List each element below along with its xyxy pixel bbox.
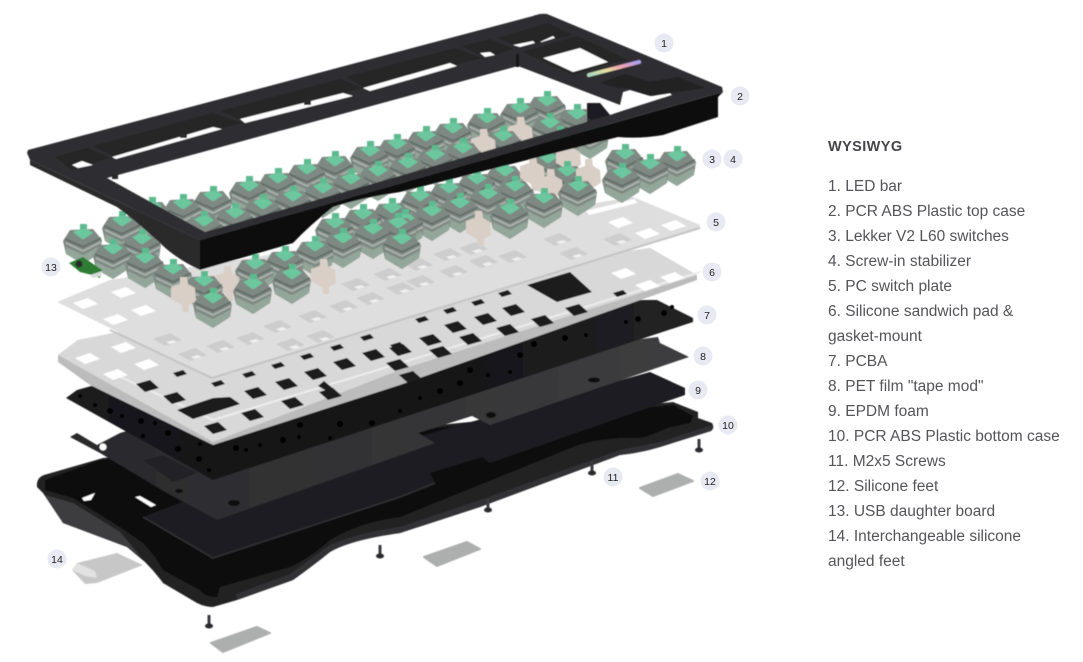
legend list: 1. LED bar (828, 178, 902, 195)
badge 13 (42, 258, 60, 276)
badge 1 (654, 34, 674, 52)
part 8: PET film (70, 337, 689, 520)
badge 11 (604, 468, 622, 486)
legend list: 11. M2x5 Screws (828, 453, 946, 470)
legend list: 3. Lekker V2 L60 switches (828, 228, 1009, 245)
part 12: silicone foot, centre (424, 542, 480, 566)
legend list: 5. PC switch plate (828, 278, 952, 295)
badge 10 (718, 416, 738, 434)
part 12: silicone foot, front (211, 627, 270, 652)
legend list: 13. USB daughter board (828, 503, 995, 520)
legend list: 4. Screw-in stabilizer (828, 253, 971, 270)
legend list: 7. PCBA (828, 353, 887, 370)
badge 12 (700, 472, 720, 490)
badge 4 (724, 150, 742, 168)
legend list: angled feet (828, 553, 905, 570)
badge 2 (730, 86, 750, 106)
badge 9: 9 (695, 385, 701, 397)
part 13: USB daughter board (69, 257, 102, 278)
legend heading: WYSIWYG (828, 139, 902, 155)
part 7: PCBA (66, 300, 693, 480)
part 11: screws (205, 439, 703, 628)
badge 13: 13 (45, 262, 57, 274)
legend list: 8. PET film "tape mod" (828, 378, 983, 395)
badge 8 (694, 346, 712, 366)
badge 5 (706, 212, 726, 232)
badge 12: 12 (704, 476, 716, 488)
badge 2: 2 (737, 91, 743, 103)
badge 10: 10 (722, 420, 734, 432)
badge 6: 6 (709, 267, 715, 279)
part 2: top case (27, 14, 723, 270)
badge 7: 7 (704, 310, 710, 322)
keyboard layers (27, 14, 723, 652)
badge 14: 14 (51, 554, 63, 566)
part 14: angled foot (72, 553, 143, 584)
part 9: EPDM foam (143, 372, 685, 558)
part 1: LED bar (589, 62, 639, 75)
badge 6 (702, 262, 722, 282)
part 3 and 4: switches and stabilizers (63, 91, 696, 328)
legend list (828, 178, 1060, 570)
badge 7 (698, 306, 716, 324)
badge 8: 8 (700, 351, 706, 363)
badge 11: 11 (608, 472, 619, 484)
legend list: 12. Silicone feet (828, 478, 938, 495)
legend list: 10. PCR ABS Plastic bottom case (828, 428, 1060, 445)
badge 3: 3 (709, 154, 715, 166)
legend list: 6. Silicone sandwich pad & (828, 303, 1013, 320)
part 6: silicone sandwich pad (58, 238, 700, 445)
badge 5: 5 (713, 217, 719, 229)
badge 4: 4 (730, 154, 736, 166)
legend list: 9. EPDM foam (828, 403, 929, 420)
badge 3 (702, 150, 722, 168)
legend list: gasket-mount (828, 328, 922, 345)
legend list: 2. PCR ABS Plastic top case (828, 203, 1025, 220)
part 12: silicone foot, rear right (640, 474, 693, 496)
badge 9 (688, 380, 708, 400)
badge 14 (48, 550, 66, 568)
part 10: bottom case (37, 402, 713, 607)
legend list: 14. Interchangeable silicone (828, 528, 1021, 545)
badge 1: 1 (661, 38, 667, 50)
exploded keyboard diagram (26, 12, 750, 654)
legend panel (828, 139, 1060, 570)
part 5: PC switch plate (57, 197, 700, 378)
